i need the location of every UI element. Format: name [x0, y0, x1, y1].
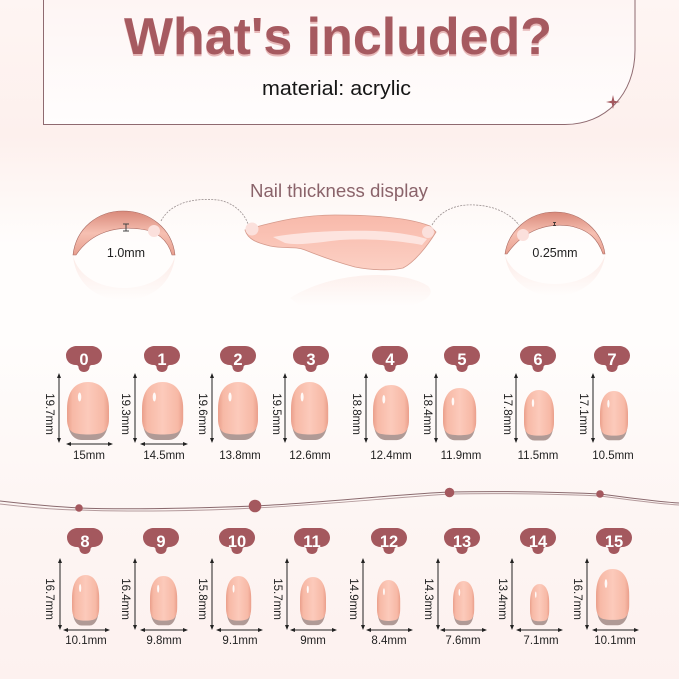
- badge 3: 3: [306, 351, 316, 369]
- height arrow 19.7mm: 19.7mm: [43, 393, 55, 435]
- height arrow 16.7mm: 16.7mm: [571, 578, 583, 620]
- heading: nail thickness display: Nail thickness display: [250, 181, 428, 201]
- nail 5: [443, 388, 476, 440]
- title: What's included?: [124, 10, 552, 68]
- glossy band: [273, 231, 427, 245]
- height arrow 16.4mm: 16.4mm: [119, 578, 131, 620]
- width arrow 10.1mm: 10.1mm: [65, 635, 107, 647]
- badge 13: 13: [453, 533, 471, 551]
- width arrow 9mm: 9mm: [300, 635, 326, 647]
- nail 12: [377, 580, 400, 625]
- thickness marker: [123, 224, 129, 231]
- width label 10.5mm: 10.5mm: [592, 450, 634, 462]
- width arrow 10.1mm: 10.1mm: [594, 635, 636, 647]
- size 13: [422, 528, 487, 647]
- nail cross-section: 0.25mm: [505, 212, 605, 296]
- size 7: [577, 346, 634, 462]
- size 6: [501, 346, 558, 462]
- highlight dot: [517, 229, 529, 241]
- header panel: [44, 0, 635, 124]
- nail 13: [453, 581, 474, 625]
- nail 15: [596, 569, 629, 625]
- height arrow 19.3mm: 19.3mm: [119, 393, 131, 435]
- badge 15: 15: [605, 533, 623, 551]
- badge 11: 11: [303, 533, 321, 551]
- width arrow 14.5mm: 14.5mm: [143, 450, 185, 462]
- size 12: [347, 528, 413, 647]
- height arrow 18.8mm: 18.8mm: [350, 393, 362, 435]
- nail 0: [67, 382, 109, 440]
- thickness marker: [553, 222, 556, 226]
- connector: left dashed arc: [161, 199, 248, 224]
- badge 8: 8: [80, 533, 90, 551]
- width label 13.8mm: 13.8mm: [219, 450, 261, 462]
- badge 7: 7: [607, 351, 617, 369]
- width arrow 8.4mm: 8.4mm: [371, 635, 407, 647]
- width label 12.6mm: 12.6mm: [289, 450, 331, 462]
- connector: right dashed arc: [432, 205, 519, 225]
- subtitle: material: material: acrylic: [262, 78, 411, 100]
- highlight dots: [246, 222, 258, 236]
- width arrow 15mm: 15mm: [73, 450, 105, 462]
- size 10: [196, 528, 263, 647]
- nail 1: [142, 382, 183, 440]
- size 11: [271, 528, 337, 647]
- width label 11.9mm: 11.9mm: [441, 450, 481, 462]
- badge 9: 9: [156, 533, 166, 551]
- size 9: [119, 528, 188, 647]
- badge 14: 14: [529, 533, 548, 551]
- height arrow 18.4mm: 18.4mm: [421, 393, 433, 435]
- nail 9: [150, 576, 177, 625]
- size 14: [496, 528, 563, 647]
- badge 6: 6: [533, 351, 543, 369]
- height arrow 14.3mm: 14.3mm: [422, 578, 434, 620]
- badge 2: 2: [233, 351, 243, 369]
- size 1: [119, 346, 188, 462]
- width arrow 7.6mm: 7.6mm: [445, 635, 481, 647]
- width label 12.4mm: 12.4mm: [370, 450, 412, 462]
- height arrow 15.7mm: 15.7mm: [271, 578, 283, 620]
- size 3: [270, 346, 331, 462]
- label: 0.25mm: 0.25mm: [532, 246, 578, 260]
- nail 7: [600, 391, 628, 440]
- width arrow 9.8mm: 9.8mm: [146, 635, 182, 647]
- badge 12: 12: [380, 533, 398, 551]
- divider line with dots: [0, 488, 679, 512]
- nail 6: [524, 390, 554, 440]
- height arrow 13.4mm: 13.4mm: [496, 578, 508, 620]
- size 5: [421, 346, 481, 462]
- height arrow 15.8mm: 15.8mm: [196, 578, 208, 620]
- size 4: [350, 346, 412, 462]
- nail 4: [373, 385, 409, 440]
- size 15: [571, 528, 639, 647]
- width label 11.5mm: 11.5mm: [518, 450, 558, 462]
- width arrow 9.1mm: 9.1mm: [222, 635, 258, 647]
- label: 1.0mm: 1.0mm: [107, 246, 145, 260]
- nail cross-section: 1.0mm: [73, 211, 175, 300]
- size 2: [196, 346, 261, 462]
- badge 10: 10: [228, 533, 246, 551]
- nail 8: [72, 575, 99, 625]
- height arrow 16.7mm: 16.7mm: [43, 578, 55, 620]
- nail 10: [226, 576, 251, 625]
- badge 0: 0: [79, 351, 89, 369]
- badge 4: 4: [385, 351, 395, 369]
- height arrow 17.1mm: 17.1mm: [577, 393, 589, 435]
- nail 2: [218, 382, 258, 440]
- nail 11: [300, 577, 326, 625]
- icon: sparkle star: [606, 95, 620, 109]
- badge 5: 5: [457, 351, 467, 369]
- badge 1: 1: [157, 351, 167, 369]
- size 8: [43, 528, 110, 647]
- nail 3: [291, 382, 328, 440]
- nail 14: [530, 584, 549, 625]
- height arrow 17.8mm: 17.8mm: [501, 393, 513, 435]
- title: What's included?: [124, 8, 552, 66]
- highlight dot: [148, 225, 160, 237]
- width arrow 7.1mm: 7.1mm: [523, 635, 559, 647]
- height arrow 19.5mm: 19.5mm: [270, 393, 282, 435]
- height arrow 14.9mm: 14.9mm: [347, 578, 359, 620]
- nail side view: [245, 215, 436, 306]
- height arrow 19.6mm: 19.6mm: [196, 393, 208, 435]
- size 0: [43, 346, 113, 462]
